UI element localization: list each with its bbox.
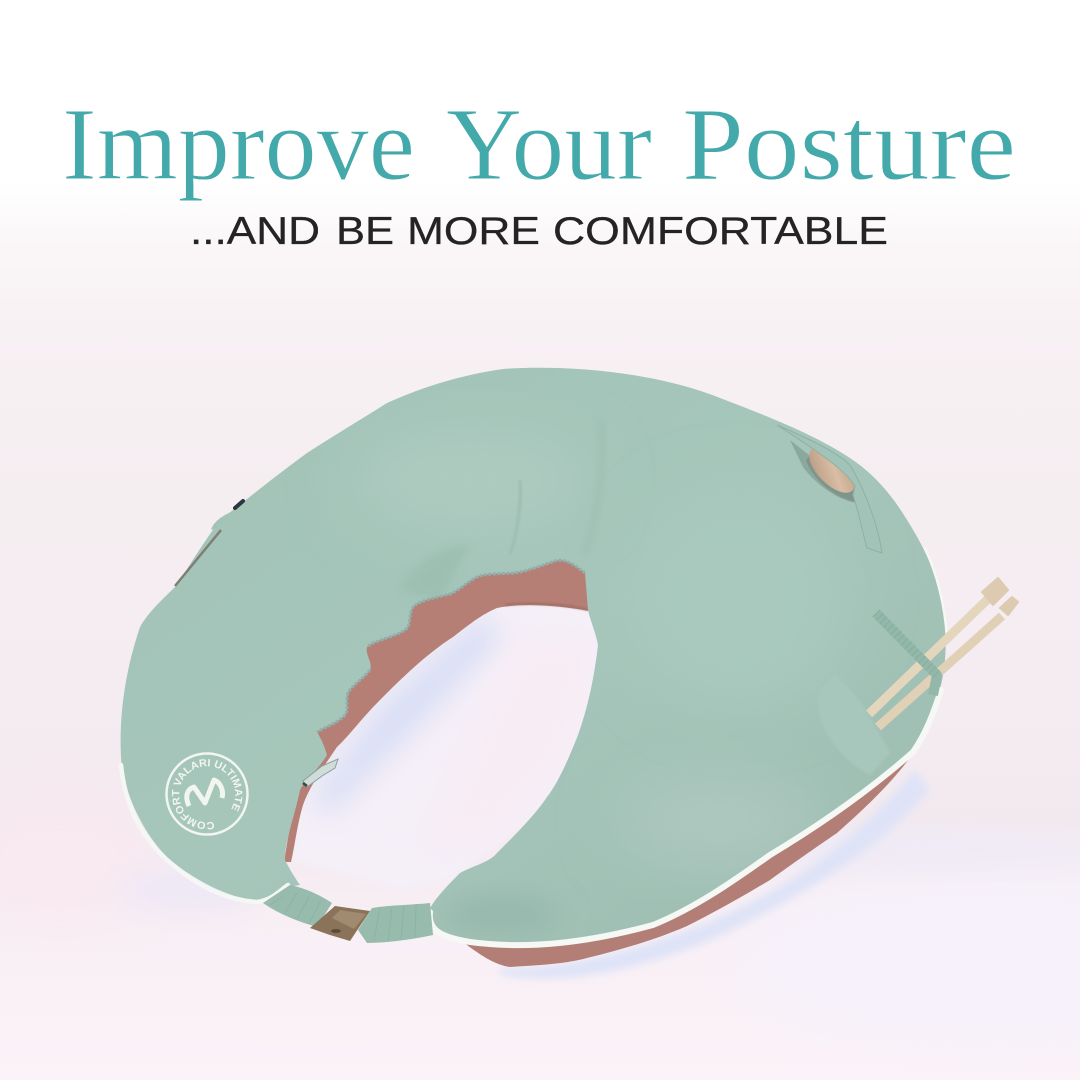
buckle: [310, 906, 370, 941]
terracotta underside at the outer edge: [463, 755, 912, 967]
subtitle: MORE: [407, 210, 540, 253]
subtitle: ...AND: [190, 210, 320, 253]
subtitle: [190, 210, 888, 253]
subtitle: COMFORTABLE: [553, 210, 888, 253]
white piping, left lobe: [121, 765, 288, 902]
title: [62, 87, 1016, 202]
subtitle: BE: [336, 210, 394, 253]
elastic strap, left: [263, 885, 332, 927]
tin in the top pocket: [790, 440, 862, 503]
dark strap tip on the back edge: [175, 501, 243, 586]
white piping, right lobe: [430, 690, 941, 945]
knitting needles: [869, 578, 1018, 727]
terracotta underside at the inner edge: [284, 550, 590, 862]
stitched seam along inner edge: [317, 560, 585, 732]
side pocket: [818, 673, 890, 775]
fabric showing through the centre opening: [290, 600, 610, 890]
dark shadow line where the underside meets the bed: [505, 604, 588, 610]
title: Posture: [682, 87, 1016, 202]
shadow on the bed under the pillow: [500, 770, 930, 979]
title: Improve: [62, 87, 415, 202]
elastic needle loop: [876, 613, 937, 695]
elastic strap, right: [358, 903, 433, 943]
top pocket flap: [777, 425, 882, 553]
nursing pillow: [119, 368, 1019, 980]
zipper pull: [303, 759, 338, 787]
green pillow body: [121, 368, 946, 946]
logo badge: COMFORT VALARI ULTIMATE: [172, 759, 242, 830]
soft fabric shading: [350, 420, 850, 935]
title: Your: [446, 87, 652, 202]
